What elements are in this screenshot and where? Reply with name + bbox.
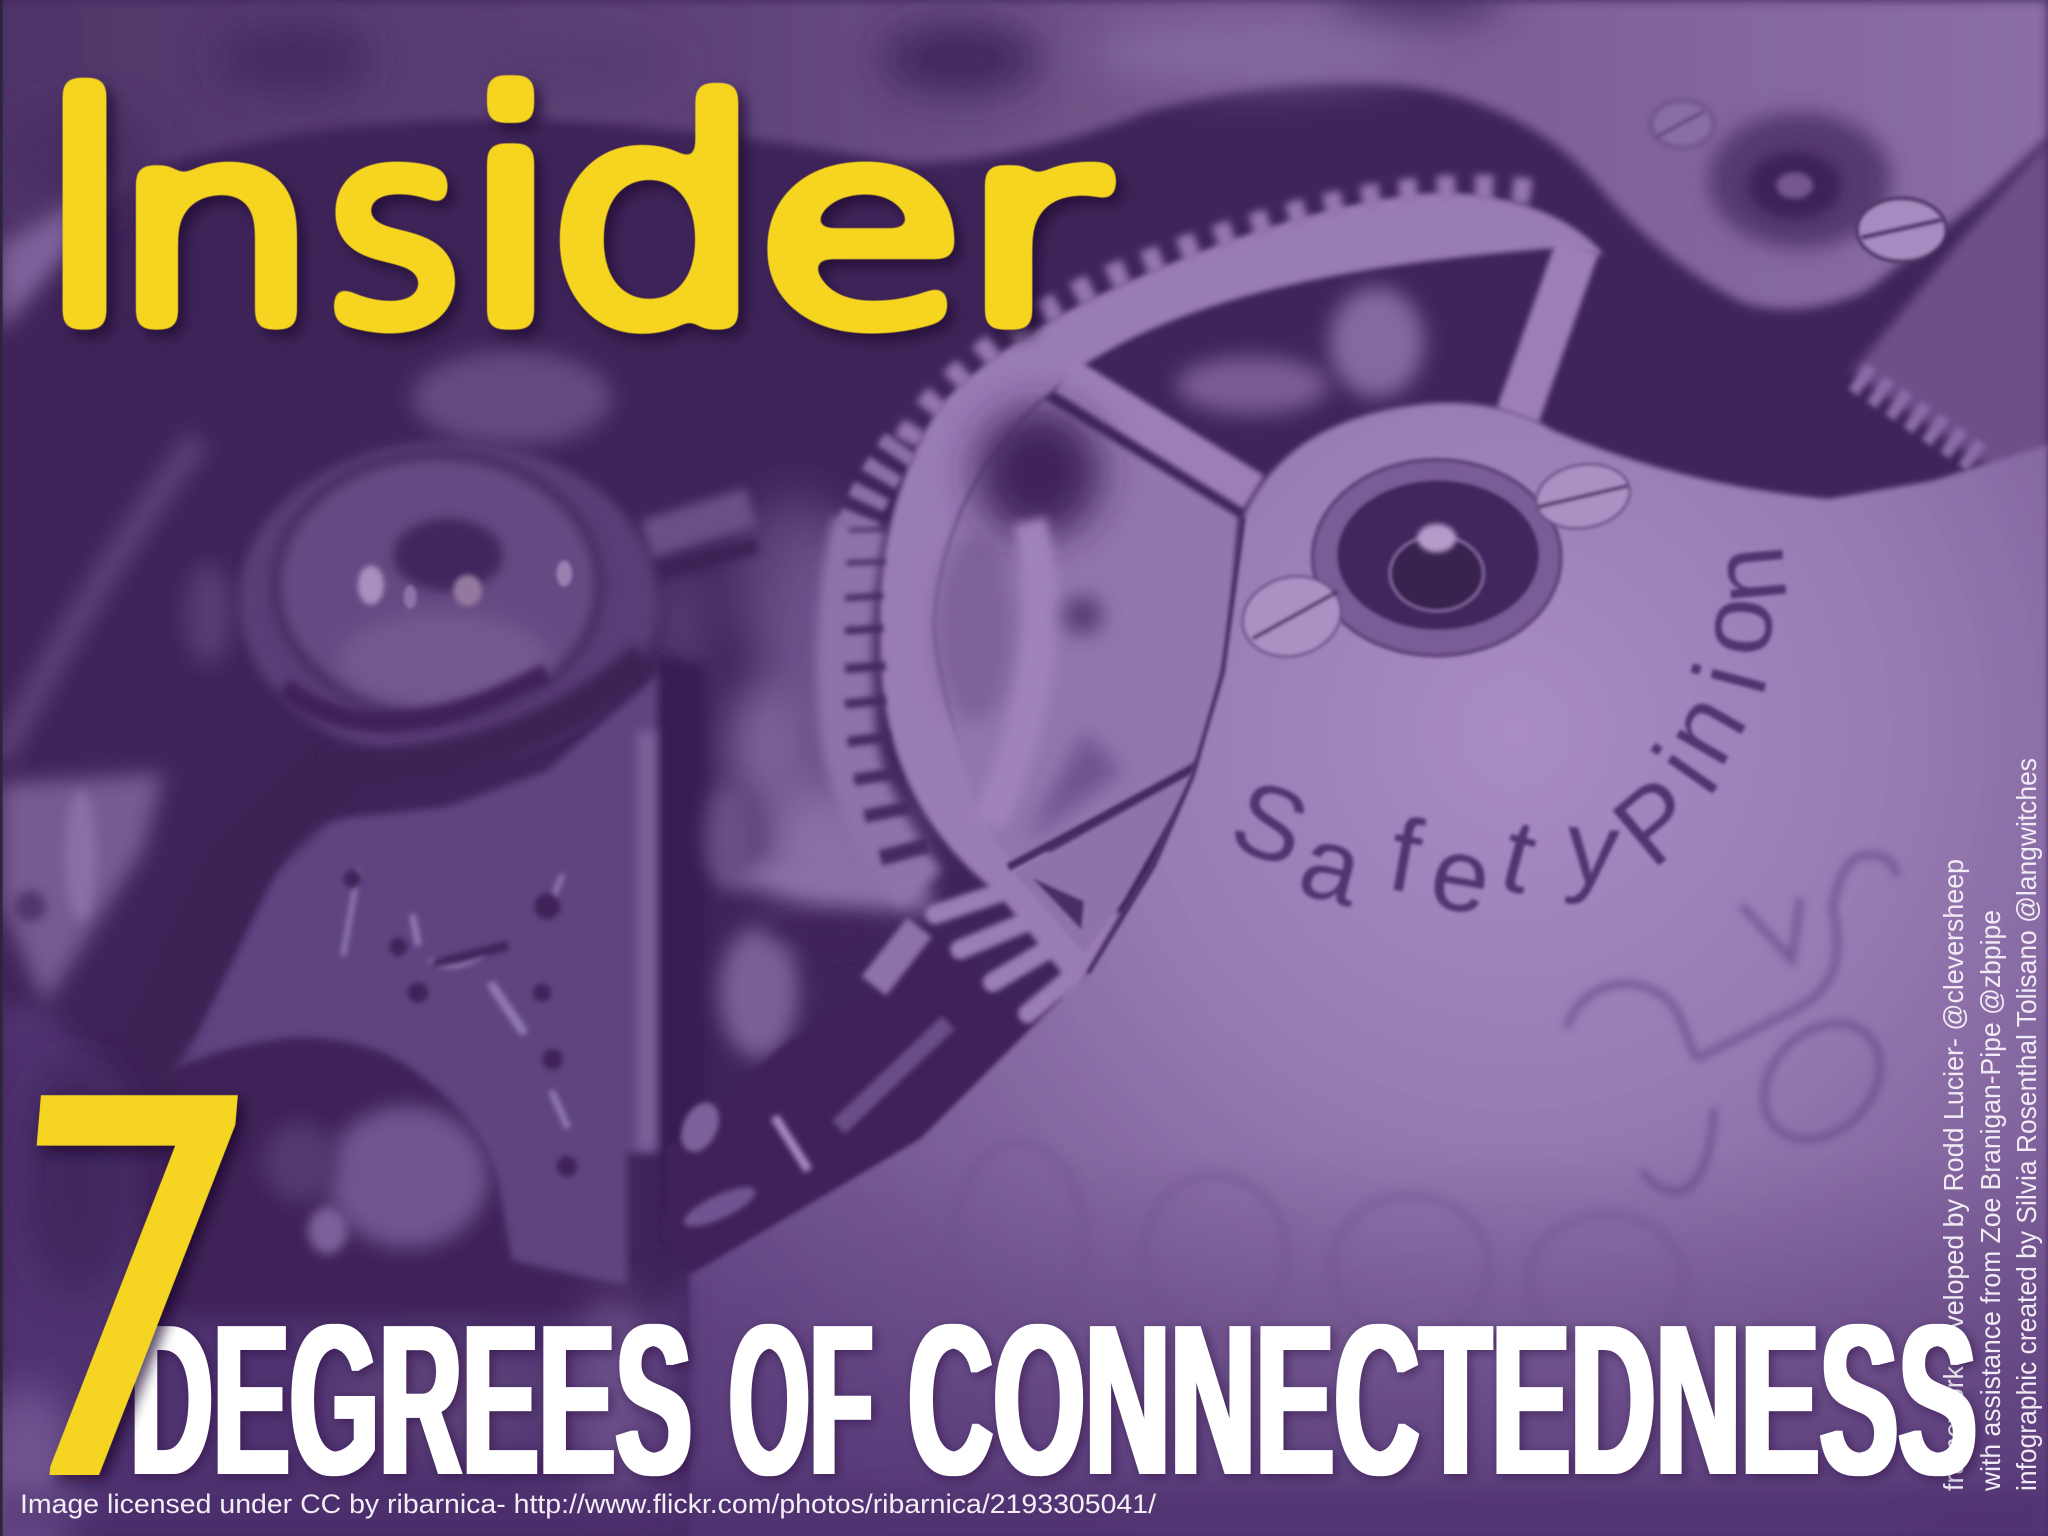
title: Insider: I	[36, 18, 133, 402]
big teeth near bottom of gear	[935, 893, 1068, 1014]
engraved text on plate: Safety Pinion	[1217, 541, 1810, 938]
upper window blurred lights	[1177, 287, 1424, 414]
title: Insider: i	[458, 28, 563, 400]
bottom title shade	[0, 1489, 2048, 1536]
screws on plate	[1234, 457, 1635, 667]
engraved scrolls	[1567, 855, 1903, 1192]
left pale curved streak	[0, 440, 199, 758]
plate lower shade	[690, 1149, 2048, 1536]
left small blob	[185, 564, 232, 664]
title: Insider: s	[325, 65, 463, 391]
big gear ring	[880, 193, 1604, 993]
plate edge shadow	[1088, 517, 1243, 973]
title: Insider: n	[113, 65, 318, 391]
bright patch above gear band	[714, 862, 934, 914]
left column behind the gear	[662, 496, 914, 908]
plate scratches dark	[344, 870, 577, 1177]
title: Degrees of Connectedness: DEGREES	[130, 1279, 692, 1520]
credit line 1: framework developed by Rodd Lucier- @cleversheep	[1938, 859, 1969, 1491]
title: Insider: d	[547, 37, 763, 398]
credit line 3: infographic created by Silvia Rosenthal Tolisano @langwitches	[2011, 758, 2042, 1491]
right gear teeth	[1857, 376, 1979, 460]
thin dark spoke and triangle below	[1008, 767, 1198, 953]
credits: vertical text	[1938, 758, 2042, 1492]
top right screw and jewel	[1651, 101, 1946, 261]
left edge strip	[0, 0, 3, 1536]
blurred ovals beside divider	[705, 784, 888, 1058]
left light triangle	[0, 773, 163, 1006]
title: Insider: e	[755, 65, 966, 391]
window inside gear	[934, 398, 1238, 866]
gear teeth: upper left	[856, 444, 901, 529]
plate holes and shadows	[0, 0, 1509, 209]
left triangular plate	[138, 673, 657, 1287]
central jewel	[1313, 460, 1561, 656]
gear teeth: upper arc	[901, 188, 1531, 453]
lower gear link highlights	[674, 927, 948, 1234]
title: Insider: r	[959, 65, 1113, 391]
central dark divider	[660, 653, 705, 1254]
upper left light streak	[0, 183, 104, 333]
image licence caption: Image licensed under CC by ribarnica- http://www.flickr.com/photos/ribarnica/2193305041/	[20, 1489, 1157, 1519]
credit line 2: with assistance from Zoe Branigan-Pipe @zbpipe	[1975, 910, 2006, 1492]
top metal plate	[0, 0, 2048, 309]
plate scratches light	[344, 872, 567, 1126]
gear spokes	[1064, 246, 1578, 492]
main lit plate with engraving	[690, 403, 2048, 1536]
faint flower motif	[953, 1143, 1685, 1345]
title: Degrees of Connectedness: OF	[729, 1279, 873, 1520]
right side gear piece	[1852, 141, 2048, 470]
lower gear band dark	[664, 914, 1063, 1273]
gear teeth gaps: left arc	[845, 529, 929, 858]
dark diagonal arm	[124, 764, 340, 1097]
mechanism jewel setting left	[239, 351, 758, 767]
hole in lower left	[118, 1037, 627, 1319]
bottom left zone	[0, 1006, 690, 1536]
plate bright right edge	[640, 731, 654, 1149]
gear tooth body left	[844, 522, 921, 888]
